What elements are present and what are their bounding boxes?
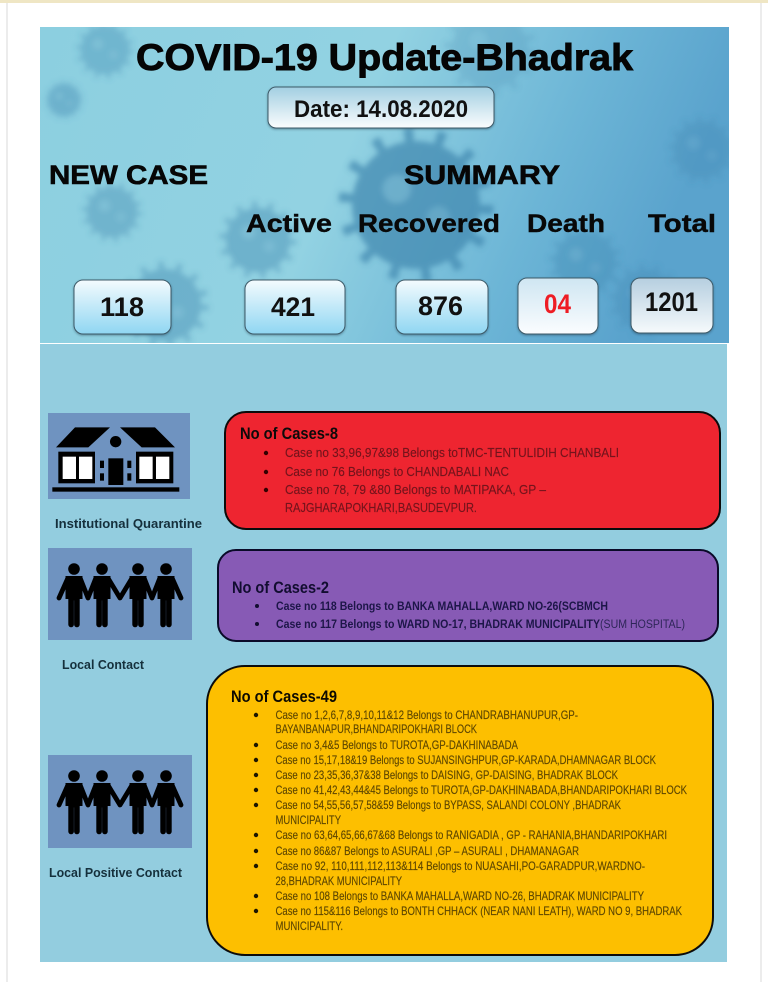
case list: [255, 601, 685, 631]
top page edge: [0, 0, 768, 3]
column label: total: Total: [648, 210, 716, 238]
heading: summary: SUMMARY: [404, 160, 560, 190]
panel: purple case box: [218, 550, 718, 641]
case list: Case no 78, 79 &80 Belongs to MATIPAKA, GP –: [285, 483, 546, 497]
heading: new case: NEW CASE: [49, 160, 208, 190]
case list: BAYANBANAPUR,BHANDARIPOKHARI BLOCK: [276, 722, 477, 736]
case list: Case no 54,55,56,57,58&59 Belongs to BYPASS, SALANDI COLONY ,BHADRAK: [276, 798, 621, 812]
case list: MUNICIPALITY: [276, 813, 341, 827]
virus background illustration: [46, 8, 733, 345]
stat: total 1201: [631, 278, 713, 333]
case list: Case no 108 Belongs to BANKA MAHALLA,WARD NO-26, BHADRAK MUNICIPALITY: [276, 889, 644, 903]
stat: recovered 876: [396, 280, 488, 334]
case list: Case no 118 Belongs to BANKA MAHALLA,WARD NO-26(SCBMCH: [276, 601, 608, 613]
case list: MUNICIPALITY.: [276, 919, 343, 933]
case list: Case no 3,4&5 Belongs to TUROTA,GP-DAKHINABADA: [276, 738, 518, 752]
case list: RAJGHARAPOKHARI,BASUDEVPUR.: [285, 501, 477, 515]
stat: total 1201: 1201: [645, 287, 698, 317]
date box: Date: 14.08.2020: [294, 96, 468, 123]
stat: death 04: [518, 278, 598, 334]
stat: new case 118: 118: [100, 292, 144, 322]
stat: new case 118: [74, 280, 171, 334]
heading: cases 2: No of Cases-2: [232, 579, 329, 597]
label: local contact: Local Contact: [62, 657, 145, 672]
stat: death 04: 04: [544, 289, 571, 319]
panel: yellow case box: [207, 666, 713, 955]
stat: active 421: 421: [271, 292, 315, 322]
case list: Case no 23,35,36,37&38 Belongs to DAISING, GP-DAISING, BHADRAK BLOCK: [276, 768, 618, 782]
case list: Case no 117 Belongs to WARD NO-17, BHADRAK MUNICIPALITY: [276, 619, 600, 631]
column label: recovered: Recovered: [358, 210, 500, 238]
label: institutional quarantine: Institutional Quarantine: [55, 516, 202, 531]
icon: institutional quarantine building: [48, 413, 190, 499]
case list: Case no 63,64,65,66,67&68 Belongs to RANIGADIA , GP - RAHANIA,BHANDARIPOKHARI: [276, 828, 667, 842]
column label: death: Death: [527, 210, 605, 238]
case list: Case no 86&87 Belongs to ASURALI ,GP – ASURALI , DHAMANAGAR: [276, 844, 579, 858]
case list: Case no 92, 110,111,112,113&114 Belongs to NUASAHI,PO-GARADPUR,WARDNO-: [276, 859, 645, 873]
date box: [268, 87, 494, 128]
label: local positive contact: Local Positive Contact: [49, 865, 183, 880]
case list: [254, 708, 687, 933]
heading: cases 49: No of Cases-49: [231, 688, 337, 706]
panel: red case box: [225, 412, 720, 529]
title: COVID-19 Update-Bhadrak: [136, 37, 633, 78]
panel: header banner: [40, 8, 733, 345]
icon: local contact people: [48, 548, 192, 640]
panel: lower case details: [40, 344, 727, 962]
case list: (SUM HOSPITAL): [600, 619, 685, 631]
icon: local positive contact people: [48, 755, 192, 848]
stat: active 421: [245, 280, 345, 334]
heading: cases 8: No of Cases-8: [240, 425, 338, 443]
case list: 28,BHADRAK MUNICIPALITY: [276, 874, 402, 888]
case list: Case no 15,17,18&19 Belongs to SUJANSINGHPUR,GP-KARADA,DHAMNAGAR BLOCK: [276, 753, 656, 767]
column label: active: Active: [246, 210, 332, 238]
case list: [264, 446, 619, 515]
case list: Case no 33,96,97&98 Belongs toTMC-TENTULIDIH CHANBALI: [285, 446, 619, 460]
case list: Case no 76 Belongs to CHANDABALI NAC: [285, 465, 509, 479]
case list: Case no 1,2,6,7,8,9,10,11&12 Belongs to CHANDRABHANUPUR,GP-: [276, 708, 578, 722]
stat: recovered 876: 876: [418, 291, 463, 321]
